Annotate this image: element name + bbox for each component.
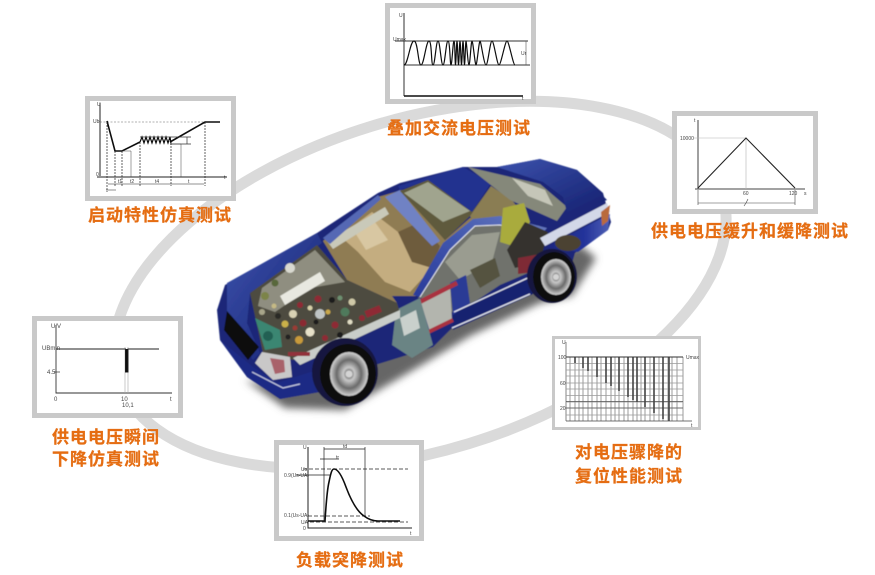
axis labels: 4.5 xyxy=(47,370,56,376)
bumper highlight xyxy=(252,372,300,388)
axis labels: t xyxy=(691,423,693,429)
axes xyxy=(97,103,227,177)
label: momentary drop xyxy=(52,428,160,469)
yellow-green seat xyxy=(500,203,530,246)
axis labels: t xyxy=(224,175,226,181)
door top white line xyxy=(420,225,540,297)
axis labels: t xyxy=(170,397,172,403)
light interior panel xyxy=(445,232,500,280)
dashed verticals xyxy=(107,122,205,192)
car illustration xyxy=(217,159,611,410)
red tube upper xyxy=(410,283,457,307)
axis labels: t xyxy=(522,96,524,102)
axis labels xyxy=(42,324,172,409)
ring: grey ellipse linking the tests xyxy=(69,34,771,536)
rear cabin tan xyxy=(470,186,530,224)
axis labels: 10000 xyxy=(680,136,694,142)
axis labels: 0.1(Us-UA) xyxy=(284,513,309,519)
white body highlight xyxy=(540,203,610,246)
windshield frame stripe xyxy=(323,195,381,244)
axis labels: U xyxy=(562,340,566,346)
axis labels: t xyxy=(188,179,190,185)
axis labels: U/V xyxy=(51,324,61,330)
axis labels: U xyxy=(303,445,307,451)
label: momentary drop: 供电电压瞬间 xyxy=(52,428,160,447)
axis labels: UA xyxy=(301,520,309,526)
grey door interior xyxy=(420,285,452,332)
tan parts rear cabin xyxy=(470,258,500,288)
voltage levels xyxy=(122,144,181,177)
hood panel xyxy=(227,233,322,360)
axis labels xyxy=(393,13,527,102)
door top arc xyxy=(413,216,547,297)
axes xyxy=(308,447,412,528)
axis labels: Umax xyxy=(393,37,407,43)
label: supply ramp: 供电电压缓升和缓降测试 xyxy=(651,222,849,241)
label: reset performance: 对电压骤降的 xyxy=(575,443,683,462)
baseline xyxy=(404,95,523,97)
axis labels: Ur xyxy=(521,51,527,57)
bumper xyxy=(220,340,327,399)
axis labels: 10,1 xyxy=(122,403,134,409)
sunroof olive surround xyxy=(400,180,491,240)
axis labels xyxy=(284,444,412,537)
axis labels: Us xyxy=(301,467,308,473)
headlight xyxy=(255,352,292,380)
label: reset performance xyxy=(575,443,683,486)
label: starting profile: 启动特性仿真测试 xyxy=(88,205,232,225)
axis labels: t1 xyxy=(118,179,122,185)
amplitude bracket xyxy=(525,41,527,65)
rear wheel xyxy=(527,249,577,303)
ripple section xyxy=(140,137,171,143)
axis labels: 100 xyxy=(558,355,567,361)
axis labels: t4 xyxy=(155,179,159,185)
light grid verticals xyxy=(570,357,683,421)
red tube lower xyxy=(416,320,453,338)
ripple limits xyxy=(140,137,191,144)
trunk lid xyxy=(497,159,607,213)
panel: starting profile test xyxy=(88,98,234,198)
axes xyxy=(403,13,405,96)
axis labels: t xyxy=(410,531,412,537)
axis labels: 60 xyxy=(743,191,749,197)
x axis xyxy=(695,188,805,190)
label: load dump: 负载突降测试 xyxy=(296,550,404,570)
tick at 4.5 xyxy=(54,371,60,373)
panel: reset performance test xyxy=(554,338,700,429)
white detail in bay xyxy=(400,310,420,336)
level leader xyxy=(296,474,331,476)
grid horizontals xyxy=(566,364,683,415)
label: AC ripple: 叠加交流电压测试 xyxy=(387,118,531,138)
top line xyxy=(566,356,683,358)
axis labels: UBmin xyxy=(42,346,60,352)
rear fender xyxy=(546,214,610,252)
dark steps above diagonal xyxy=(575,357,669,421)
axis labels xyxy=(558,340,700,429)
pale windshield pillar xyxy=(385,190,440,246)
panel: momentary drop test xyxy=(34,318,180,416)
front seat highlight xyxy=(352,218,388,250)
axis labels xyxy=(93,102,226,185)
panel: supply ramp test xyxy=(674,114,816,212)
axis labels: s xyxy=(804,191,807,197)
axis labels: tr xyxy=(336,455,339,461)
axis labels: td xyxy=(343,444,347,450)
sweep waveform xyxy=(404,41,515,65)
seats and tan upholstery xyxy=(340,212,432,292)
cabin interior xyxy=(323,190,540,303)
label: reset performance: 复位性能测试 xyxy=(575,466,683,486)
front grille xyxy=(224,311,259,360)
axis labels: 0 xyxy=(54,397,58,403)
engine parts xyxy=(255,263,382,356)
red suspension parts xyxy=(518,254,540,274)
axis labels: t2 xyxy=(130,179,134,185)
front wheel xyxy=(312,338,378,406)
rear window shine xyxy=(512,178,553,206)
voltage trace xyxy=(56,349,159,372)
dashed levels xyxy=(303,469,408,522)
axis labels: 0 xyxy=(303,526,306,532)
axis labels: Ub xyxy=(93,119,100,125)
reference guides xyxy=(693,138,746,189)
guide lines xyxy=(125,347,128,393)
rear suspension xyxy=(555,235,581,251)
reference lines xyxy=(395,41,530,65)
top dashed reference xyxy=(100,121,205,123)
panel: load dump test xyxy=(276,442,422,538)
fender chrome strip xyxy=(293,310,400,365)
door lower panel xyxy=(453,276,533,330)
time arrows xyxy=(106,184,204,190)
axes xyxy=(56,325,172,393)
door sill strip xyxy=(452,276,532,328)
x axis xyxy=(566,420,692,422)
rear mechanical dark parts xyxy=(507,222,548,268)
axis labels: Umax xyxy=(686,355,700,361)
tail light xyxy=(601,205,610,226)
axis labels: U xyxy=(97,102,101,108)
car body silhouette xyxy=(217,159,611,399)
axis labels: 20 xyxy=(560,406,566,412)
voltage curve xyxy=(107,121,220,151)
headlight red detail xyxy=(270,358,285,374)
rear window xyxy=(468,167,567,221)
label: momentary drop: 下降仿真测试 xyxy=(52,449,160,469)
rear cutaway xyxy=(418,225,540,315)
panel: AC ripple test xyxy=(388,6,534,102)
load dump pulse xyxy=(308,469,400,521)
engine bay xyxy=(250,245,400,360)
engine cover grey xyxy=(258,250,345,312)
axis labels: t xyxy=(694,118,696,124)
blue seat block xyxy=(450,275,470,315)
axis labels xyxy=(680,118,807,197)
axis labels: 0.9(Us-UA) xyxy=(284,473,309,479)
windshield glass strip xyxy=(327,207,389,249)
triangle ramp xyxy=(698,138,795,188)
axis labels: U xyxy=(399,13,403,19)
car shadow xyxy=(245,245,596,410)
axis labels: 60 xyxy=(560,381,566,387)
y axis xyxy=(697,120,699,189)
axis labels: 120 xyxy=(789,191,798,197)
axis labels: 10 xyxy=(121,397,128,403)
roof panel xyxy=(398,167,491,212)
time markers xyxy=(320,447,365,521)
y axis xyxy=(565,342,567,421)
sill lower bay xyxy=(392,298,433,358)
white intake bar xyxy=(280,272,325,305)
sunroof glass xyxy=(404,182,470,222)
dip pulse xyxy=(126,349,128,372)
darker lower rows xyxy=(566,402,683,408)
duration bracket xyxy=(698,190,795,206)
axis labels: 0 xyxy=(96,172,99,178)
dark footwell xyxy=(398,222,440,268)
